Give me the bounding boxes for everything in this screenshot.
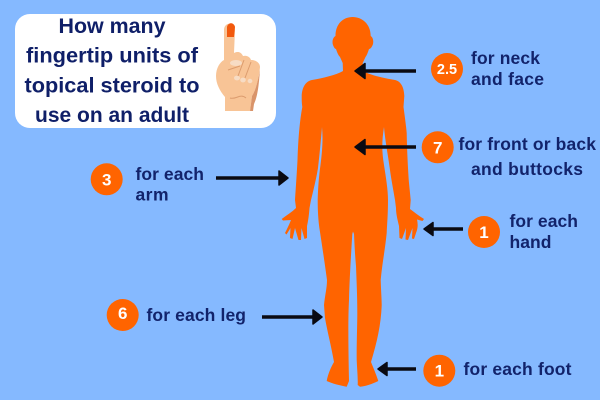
title <box>24 14 200 127</box>
callout: neck and face: for neck <box>471 48 540 68</box>
callout: neck and face: 2.5 <box>437 62 457 78</box>
callout: each arm: 3 <box>102 170 111 190</box>
callout: each foot: 1 <box>435 362 444 381</box>
body silhouette <box>282 17 424 387</box>
callout: front or back: for front or back <box>458 134 596 154</box>
callout: each hand <box>424 211 578 252</box>
callout: front or back <box>355 131 596 179</box>
callout: front or back: and buttocks <box>471 159 583 179</box>
callout: each leg: 6 <box>118 304 127 323</box>
arrow: to neck <box>355 64 416 78</box>
callout: each foot <box>378 355 572 387</box>
title: topical steroid to <box>24 74 200 98</box>
callout: each arm: for each <box>136 164 204 184</box>
arrow: to hand <box>424 222 463 236</box>
callout: front or back: 7 <box>433 138 442 158</box>
title: use on an adult <box>35 103 189 127</box>
callout: each arm: arm <box>136 185 168 205</box>
callout: each hand: for each <box>510 211 578 231</box>
title: How many <box>58 14 166 38</box>
callout: each leg <box>107 299 322 331</box>
callout: each leg: for each leg <box>146 305 246 325</box>
callout: each hand: 1 <box>479 223 489 242</box>
callout: each foot: for each foot <box>464 359 572 379</box>
arrow: to arm <box>216 171 288 185</box>
title: fingertip units of <box>26 44 199 68</box>
icon: hand with fingertip of cream <box>216 23 260 111</box>
callout: each hand: hand <box>510 232 552 252</box>
arrow: to torso <box>355 140 416 154</box>
callout: neck and face: and face <box>471 69 544 89</box>
arrow: to foot <box>378 362 416 376</box>
title panel <box>15 14 276 128</box>
callout: neck and face <box>355 48 544 89</box>
arrow: to leg <box>262 310 322 324</box>
callout: each arm <box>91 163 288 205</box>
